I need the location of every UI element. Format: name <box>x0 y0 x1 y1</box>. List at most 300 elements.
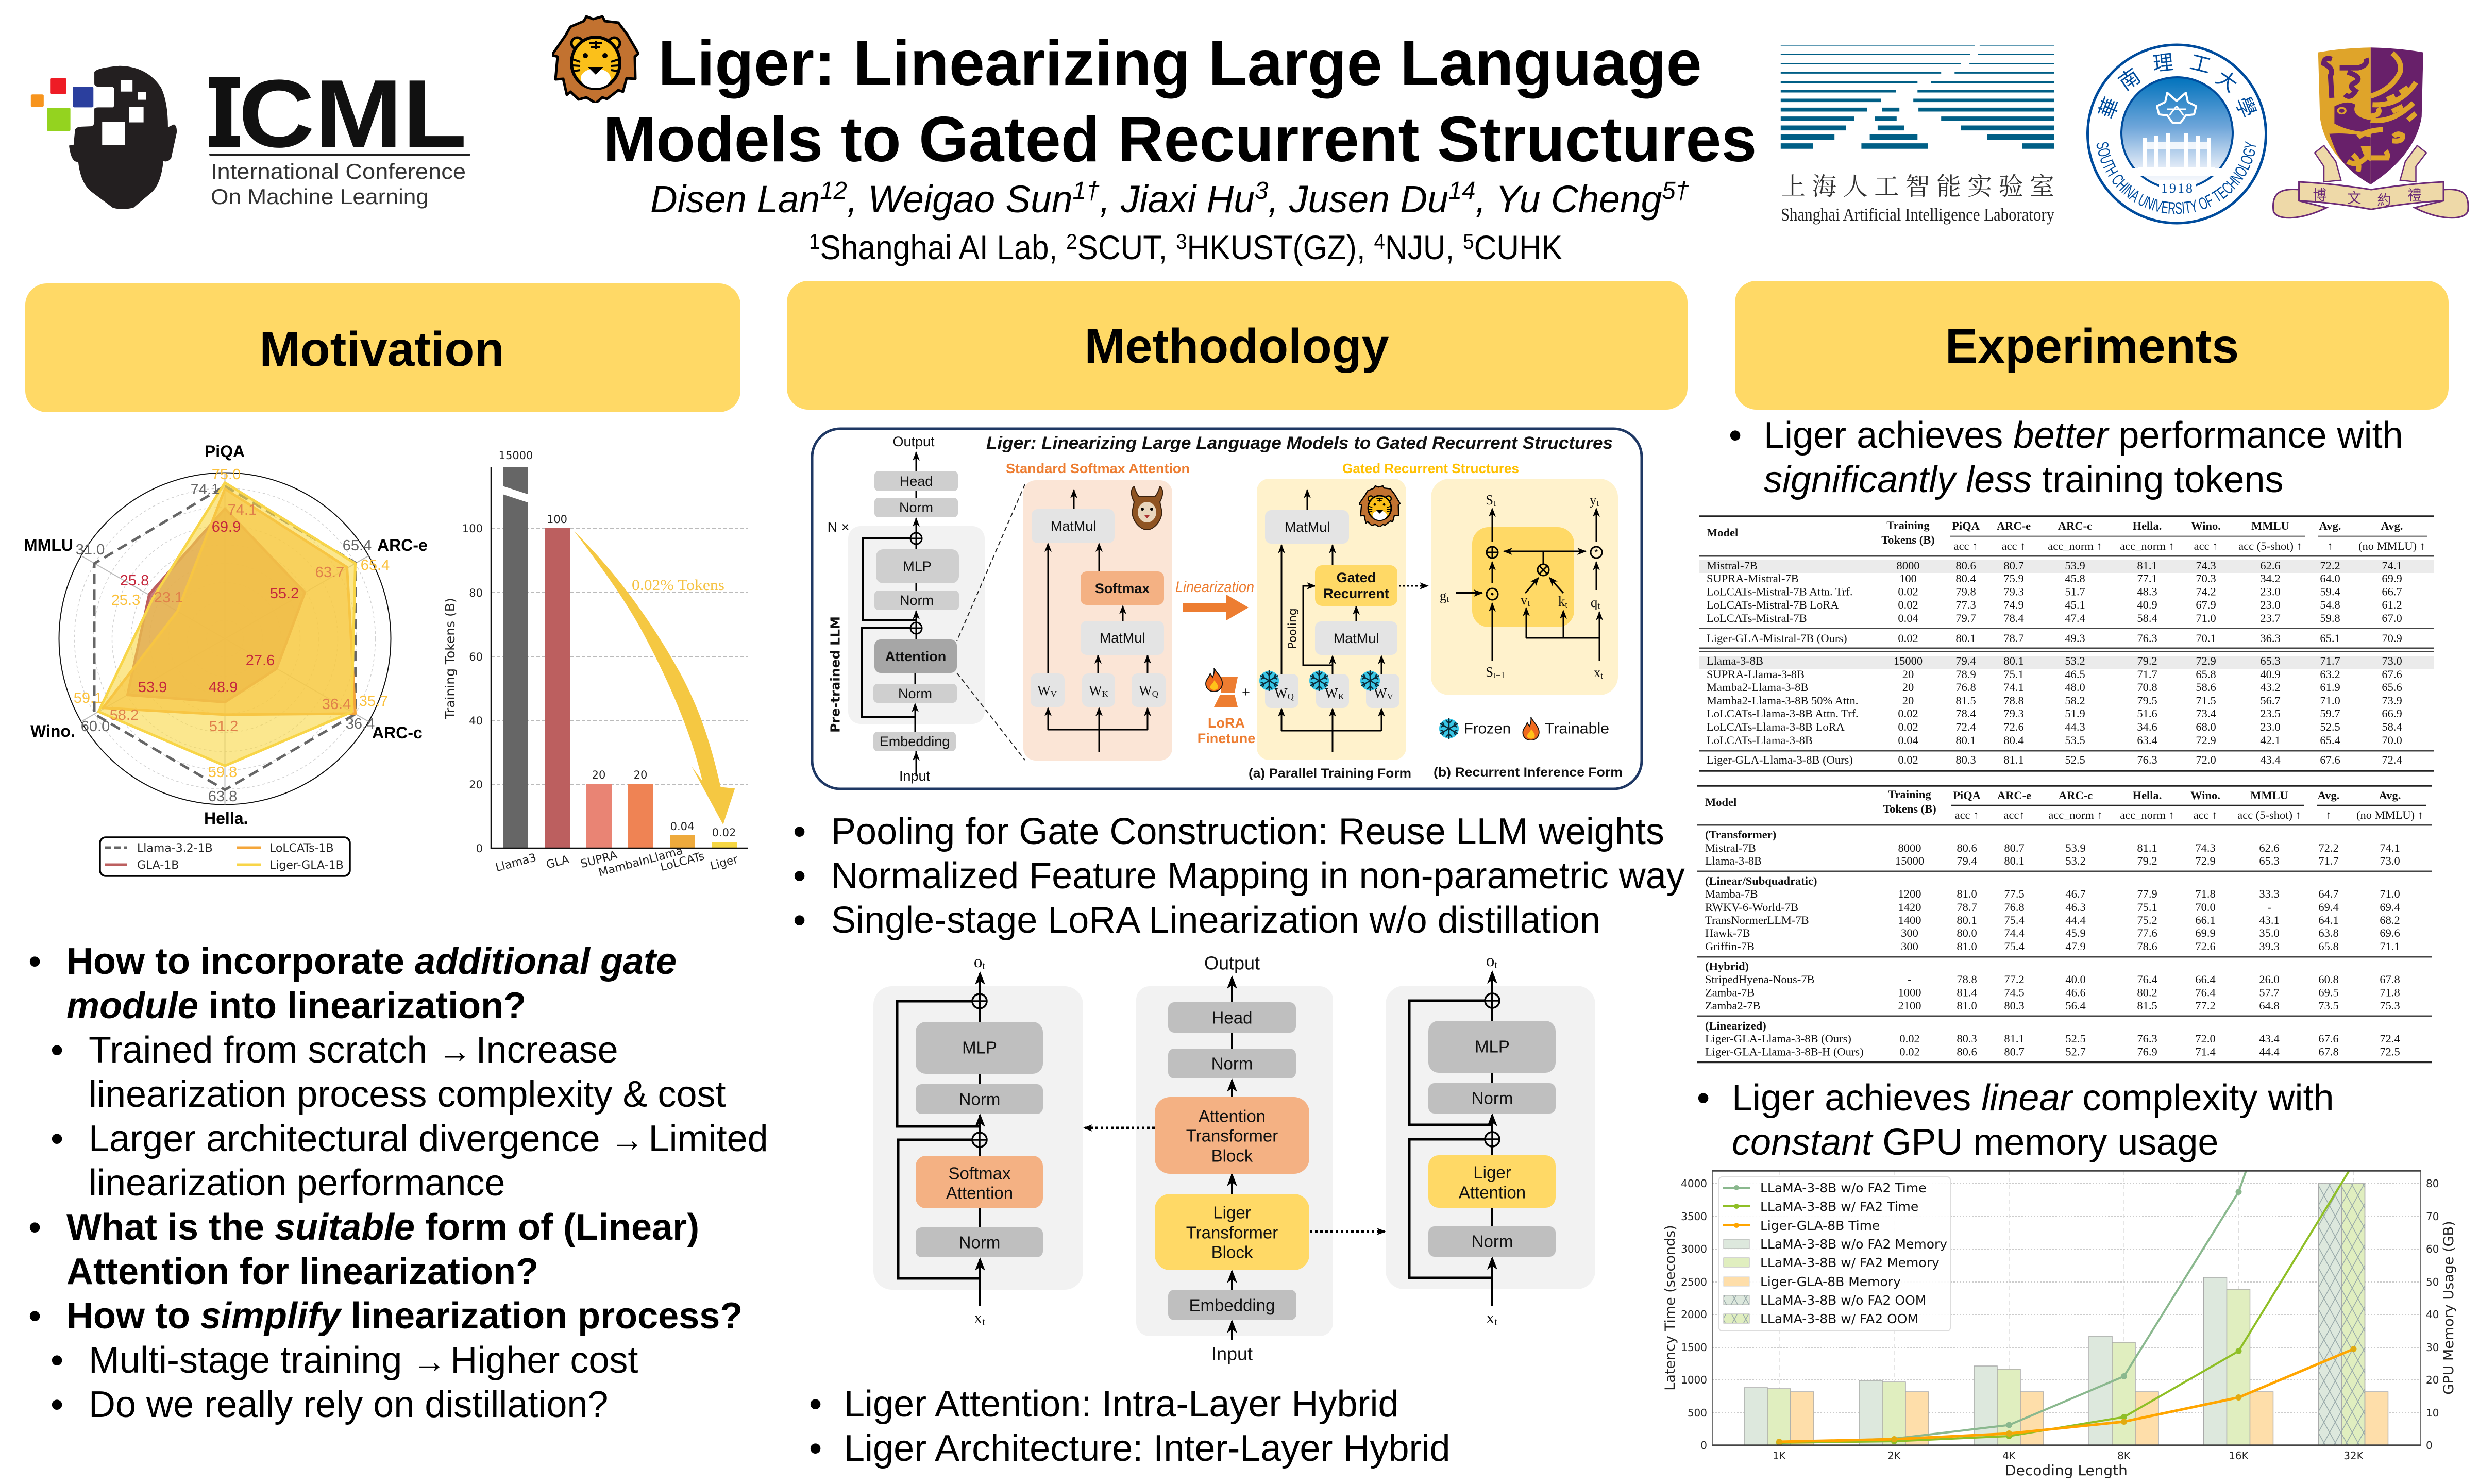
left axis ticks: 2000 <box>1681 1308 1707 1321</box>
chart legend: Liger-GLA-8B Memory <box>1760 1274 1901 1289</box>
table: model comparison: (Transformer) <box>1705 828 1776 841</box>
table: linearization results: 52.5 <box>2065 753 2085 766</box>
bar x labels: Llama3 <box>494 851 538 874</box>
logo: CUHK crest: 禮 <box>2407 188 2422 203</box>
panel: liger attention block: Norm <box>1472 1088 1513 1108</box>
left axis ticks: 4000 <box>1681 1177 1707 1190</box>
table: model comparison: 79.2 <box>2137 854 2157 867</box>
table: model comparison: 67.6 <box>2318 1032 2339 1045</box>
table: linearization results: 70.9 <box>2382 632 2402 645</box>
table: model comparison: 78.7 <box>1957 901 1977 914</box>
panel: recurrent inference form: t <box>1493 498 1496 508</box>
table: model comparison: 300 <box>1901 940 1918 953</box>
panel: recurrent inference form: t <box>1596 498 1599 508</box>
bar value labels: 0.02 <box>712 827 736 839</box>
bar value labels: 20 <box>592 769 605 781</box>
panel: transformer stack: Block <box>1211 1243 1253 1261</box>
table: linearization results: 72.0 <box>2196 753 2216 766</box>
table: linearization results: acc ↑ <box>2002 539 2026 552</box>
table: model comparison: 71.1 <box>2380 940 2400 953</box>
radar axis labels: Hella. <box>204 809 248 828</box>
diagram: Liger linearization framework <box>812 429 1642 789</box>
panel: pre-trained LLM stack: Head <box>900 474 933 489</box>
authors: , Weigao Sun <box>847 178 1073 221</box>
table: model comparison: 76.3 <box>2137 1032 2157 1045</box>
left axis ticks: 3000 <box>1681 1243 1707 1255</box>
arrow: linearization <box>1175 579 1254 620</box>
table: model comparison: 77.2 <box>2195 999 2216 1012</box>
table: linearization results: 23.5 <box>2260 707 2281 720</box>
table: linearization results: 65.4 <box>2320 734 2340 747</box>
table: linearization results: 34.6 <box>2137 720 2157 733</box>
x axis ticks: 8K <box>2117 1449 2131 1462</box>
text block: motivation bullets: • <box>50 1118 63 1159</box>
radar axis labels: PiQA <box>205 442 245 461</box>
bars <box>502 467 737 848</box>
y axis ticks <box>462 522 483 855</box>
table: model comparison: 77.6 <box>2137 926 2157 939</box>
radar legend: Llama-3.2-1B <box>137 842 213 855</box>
x axis ticks: 1K <box>1773 1449 1786 1462</box>
table: model comparison: RWKV-6-World-7B <box>1705 901 1798 914</box>
table: model comparison: 79.4 <box>1957 854 1977 867</box>
table: model comparison: 26.0 <box>2259 973 2280 986</box>
text block: motivation bullets: • <box>28 1295 41 1337</box>
panel: gated recurrent parallel training form <box>1257 461 1519 760</box>
radar legend <box>100 837 350 876</box>
table: model comparison: acc_norm ↑ <box>2048 808 2103 821</box>
text block: experiments bullet two: constant GPU memory usage <box>1732 1122 2218 1163</box>
table: linearization results: ↑ <box>2327 539 2333 552</box>
panel: pre-trained LLM stack: N × <box>828 519 849 535</box>
left axis ticks: 1000 <box>1681 1374 1707 1386</box>
table: model comparison: Liger-GLA-Llama-3-8B-H (Ours) <box>1705 1045 1864 1058</box>
table: linearization results: 72.9 <box>2196 734 2216 747</box>
text block: methodology bullets <box>793 811 1685 941</box>
radar values: 25.3 <box>111 592 140 609</box>
table: linearization results: 77.1 <box>2137 572 2157 585</box>
table: model comparison: 73.0 <box>2380 854 2400 867</box>
table: model comparison: acc↑ <box>2003 808 2025 821</box>
affiliations: 5 <box>1463 229 1474 254</box>
text block: methodology bullets: • <box>793 855 806 897</box>
table: model comparison: 53.2 <box>2065 854 2086 867</box>
table: linearization results: 67.6 <box>2382 668 2402 681</box>
table: model comparison: 81.0 <box>1957 887 1977 900</box>
table: linearization results: 0.02 <box>1898 598 1918 611</box>
table: model comparison: 73.5 <box>2318 999 2339 1012</box>
text block: motivation bullets: Attention for linearization? <box>66 1251 538 1292</box>
panel: pre-trained LLM stack: Embedding <box>880 734 950 749</box>
text block: motivation bullets: linearization performance <box>89 1162 505 1204</box>
table: linearization results: 67.6 <box>2320 753 2340 766</box>
table: linearization results: 40.9 <box>2260 668 2281 681</box>
table: linearization results: 47.4 <box>2065 612 2085 625</box>
logo: South China University of Technology: SOUTH CHINA UNIVERSITY OF TECHNOLOGY <box>2096 141 2256 214</box>
table: linearization results: Avg. <box>2319 519 2341 532</box>
left axis ticks: 3500 <box>1681 1210 1707 1223</box>
table: linearization results: 71.5 <box>2196 694 2216 707</box>
table: model comparison: 76.4 <box>2137 973 2157 986</box>
table: linearization results: 42.1 <box>2260 734 2281 747</box>
table: linearization results: 63.2 <box>2320 668 2340 681</box>
table: linearization results: 79.4 <box>1955 654 1976 667</box>
table: linearization results: 73.0 <box>2382 654 2402 667</box>
affiliations: 3 <box>1176 229 1187 254</box>
table: linearization results: 40.9 <box>2137 598 2157 611</box>
table: model comparison: Hawk-7B <box>1705 926 1750 939</box>
table: linearization results: 64.0 <box>2320 572 2340 585</box>
caption: b recurrent inference form: (b) Recurrent Inference Form <box>1434 765 1623 780</box>
table: linearization results: 0.02 <box>1898 632 1918 645</box>
table: model comparison: Model <box>1705 796 1736 808</box>
table: model comparison: 72.0 <box>2195 1032 2216 1045</box>
panel: standard softmax attention: W <box>1037 683 1051 698</box>
arrow: attention block to softmax attention <box>1084 1126 1155 1129</box>
table: linearization results: 73.4 <box>2196 707 2216 720</box>
chart legend: LLaMA-3-8B w/ FA2 OOM <box>1760 1311 1918 1326</box>
logo: South China University of Technology <box>2086 43 2267 225</box>
text block: motivation bullets: Do we really rely on distillation? <box>89 1384 608 1425</box>
table: linearization results: 73.9 <box>2382 694 2402 707</box>
panel: transformer stack: Head <box>1212 1008 1252 1027</box>
legend: frozen and trainable: Frozen <box>1464 720 1511 737</box>
text block: methodology bullets: Normalized Feature Mapping in non-parametric way <box>831 855 1685 897</box>
text block: methodology bullets: Single-stage LoRA Linearization w/o distillation <box>831 900 1600 941</box>
table: model comparison: 80.1 <box>1957 914 1977 926</box>
right axis ticks: 50 <box>2426 1276 2439 1288</box>
table: model comparison: 46.6 <box>2065 986 2086 999</box>
panel: softmax attention block: MLP <box>962 1038 997 1057</box>
panel: gated recurrent parallel training form: Gated <box>1337 570 1376 585</box>
radar values: 27.6 <box>246 652 275 669</box>
table: model comparison: acc ↑ <box>2194 808 2217 821</box>
text block: methodology bullets: • <box>793 900 806 941</box>
table: model comparison: Hella. <box>2133 789 2162 802</box>
table: model comparison: 46.7 <box>2065 887 2086 900</box>
table: model comparison: 80.7 <box>2004 1045 2025 1058</box>
radar values: 74.1 <box>228 502 257 518</box>
table: model comparison: 8000 <box>1898 841 1921 854</box>
table: model comparison: 64.8 <box>2259 999 2280 1012</box>
affiliations: HKUST(GZ), <box>1187 228 1374 266</box>
table: linearization results: Hella. <box>2133 519 2162 532</box>
text block: motivation bullets: Larger architectural divergence → Limited <box>89 1118 768 1159</box>
table: model comparison: 68.2 <box>2380 914 2400 926</box>
bar x labels: Liger <box>709 853 740 873</box>
panel: transformer stack: Attention <box>1199 1107 1266 1125</box>
table: model comparison: 77.2 <box>2004 973 2025 986</box>
panel: gated recurrent parallel training form: Q <box>1288 692 1294 701</box>
panel: recurrent inference form: t <box>1446 594 1449 604</box>
table: linearization results: 65.8 <box>2196 668 2216 681</box>
table: linearization results: 51.9 <box>2065 707 2085 720</box>
table: model comparison: (Linearized) <box>1705 1019 1766 1032</box>
table: linearization results: 58.6 <box>2196 681 2216 694</box>
table: model comparison: Llama-3-8B <box>1705 854 1762 867</box>
table: model comparison: ↑ <box>2325 808 2332 821</box>
table: model comparison: 80.6 <box>1957 841 1977 854</box>
text block: motivation bullets: What is the suitable form of (Linear) <box>66 1207 699 1248</box>
arrow: linearization: Linearization <box>1175 579 1254 596</box>
table: linearization results: 0.02 <box>1898 753 1918 766</box>
bar value labels <box>499 449 736 839</box>
table: model comparison: 60.8 <box>2318 973 2339 986</box>
affiliations: 2 <box>1066 229 1077 254</box>
panel: gated recurrent parallel training form: V <box>1387 692 1394 701</box>
panel: gated recurrent parallel training form: MatMul <box>1285 519 1330 535</box>
table: linearization results: 75.1 <box>2003 668 2024 681</box>
panel: gated recurrent parallel training form: Pooling <box>1286 608 1300 649</box>
logo: South China University of Technology: 理 <box>2152 51 2174 76</box>
table: linearization results: Liger-GLA-Llama-3-8B (Ours) <box>1707 753 1853 766</box>
panel: recurrent inference form: S <box>1486 664 1493 680</box>
heading: Experiments <box>1735 281 2449 410</box>
logo: South China University of Technology: 大 <box>2212 66 2241 96</box>
table: model comparison: 80.7 <box>2004 841 2025 854</box>
table: linearization results: 71.0 <box>2196 612 2216 625</box>
chart legend: LLaMA-3-8B w/o FA2 OOM <box>1760 1293 1926 1308</box>
text block: methodology bullets: Pooling for Gate Construction: Reuse LLM weights <box>831 811 1664 852</box>
panel: gated recurrent parallel training form: W <box>1374 685 1387 701</box>
panel: transformer stack: Transformer <box>1186 1126 1278 1145</box>
logo: CUHK crest <box>2273 47 2468 218</box>
table: model comparison: Avg. <box>2318 789 2339 802</box>
panel: pre-trained LLM stack: Pre-trained LLM <box>828 616 843 733</box>
table: linearization results: 72.4 <box>1955 720 1976 733</box>
table: model comparison: 69.4 <box>2318 901 2339 914</box>
table: linearization results: 45.8 <box>2065 572 2085 585</box>
icon: LoRA finetune <box>1198 668 1255 746</box>
radar values: 63.7 <box>315 564 344 581</box>
table: model comparison: ARC-c <box>2059 789 2093 802</box>
table: linearization results: 48.0 <box>2065 681 2085 694</box>
bar x labels: SUPRA <box>579 849 619 871</box>
logo: Shanghai AI Laboratory: 上海人工智能实验室 <box>1781 173 2054 200</box>
table: linearization results: 71.0 <box>2320 694 2340 707</box>
table: model comparison: 81.4 <box>1957 986 1977 999</box>
title: Models to Gated Recurrent Structures <box>603 104 1757 175</box>
text block: experiments bullet one: • <box>1729 415 1742 456</box>
table: linearization results: 53.5 <box>2065 734 2085 747</box>
table: model comparison: - <box>2267 901 2271 914</box>
affiliations: 1 <box>809 229 820 254</box>
table: linearization results: 100 <box>1899 572 1917 585</box>
table: linearization results: 23.7 <box>2260 612 2281 625</box>
left axis ticks <box>1681 1177 1707 1452</box>
panel: standard softmax attention: MatMul <box>1100 630 1145 646</box>
panel: recurrent inference form: t <box>1597 601 1600 610</box>
table: model comparison: 76.4 <box>2195 986 2216 999</box>
panel: transformer stack: Block <box>1211 1146 1253 1166</box>
y axis title: Training Tokens (B) <box>443 598 458 720</box>
panel: softmax attention block: Norm <box>959 1233 1000 1252</box>
icon: lion <box>1359 486 1400 527</box>
table: model comparison: 71.4 <box>2195 1045 2216 1058</box>
table: linearization results: 79.8 <box>1955 585 1976 598</box>
text block: experiments bullet two: Liger achieves linear complexity with <box>1732 1077 2334 1119</box>
table: linearization results: 80.1 <box>2003 654 2024 667</box>
panel: standard softmax attention: W <box>1089 683 1102 698</box>
right axis ticks: 40 <box>2426 1308 2439 1321</box>
table: model comparison: ARC-e <box>1997 789 2031 802</box>
bar x labels: GLA <box>545 853 570 872</box>
radar values: 65.4 <box>361 557 390 574</box>
table: model comparison: 77.5 <box>2004 887 2025 900</box>
table: linearization results: 61.9 <box>2320 681 2340 694</box>
bar value labels: 20 <box>634 769 647 781</box>
radar values: 58.2 <box>110 707 139 723</box>
panel: pre-trained LLM stack: Norm <box>898 686 932 701</box>
table: linearization results: 48.3 <box>2137 585 2157 598</box>
affiliations: Shanghai AI Lab, <box>820 228 1066 266</box>
table: model comparison: 43.1 <box>2259 914 2280 926</box>
table: linearization results: 78.7 <box>2003 632 2024 645</box>
table: model comparison: 47.9 <box>2065 940 2086 953</box>
left axis ticks: 500 <box>1688 1407 1707 1419</box>
table: model comparison: 72.9 <box>2195 854 2216 867</box>
table: linearization results: 68.0 <box>2196 720 2216 733</box>
panel: recurrent inference form: t <box>1600 671 1603 680</box>
panel: pre-trained LLM stack: Input <box>899 768 931 784</box>
table: model comparison: 52.5 <box>2065 1032 2086 1045</box>
table: model comparison: 72.6 <box>2195 940 2216 953</box>
table: model comparison: 74.5 <box>2004 986 2025 999</box>
table: model comparison: 69.9 <box>2195 926 2216 939</box>
table: model comparison: 46.3 <box>2065 901 2086 914</box>
heading: Experiments: Experiments <box>1945 319 2239 374</box>
table: linearization results: 75.9 <box>2003 572 2024 585</box>
table: model comparison: 64.7 <box>2318 887 2339 900</box>
radar values: 63.8 <box>208 788 237 805</box>
table: linearization results: 54.8 <box>2320 598 2340 611</box>
panel: transformer stack: Transformer <box>1186 1223 1278 1242</box>
table: linearization results: 46.5 <box>2065 668 2085 681</box>
panel: softmax attention block <box>873 953 1083 1328</box>
panel: recurrent inference form: t <box>1527 598 1530 608</box>
table: model comparison: 71.7 <box>2318 854 2339 867</box>
table: model comparison: 0.02 <box>1899 1032 1920 1045</box>
table: model comparison: 2100 <box>1898 999 1921 1012</box>
table: linearization results: 53.2 <box>2065 654 2085 667</box>
table: model comparison: 53.9 <box>2065 841 2086 854</box>
table: model comparison: 1400 <box>1898 914 1921 926</box>
text block: motivation bullets: Multi-stage training → Higher cost <box>89 1340 638 1381</box>
chart legend: Liger-GLA-8B Time <box>1760 1218 1880 1233</box>
panel: softmax attention block: Norm <box>959 1089 1000 1109</box>
table: linearization results: 0.02 <box>1898 585 1918 598</box>
x axis ticks: 2K <box>1887 1449 1901 1462</box>
table: model comparison: 75.4 <box>2004 940 2025 953</box>
panel: recurrent inference form: y <box>1590 492 1596 508</box>
table: linearization results: SUPRA-Llama-3-8B <box>1707 668 1805 681</box>
table: linearization results: Mamba2-Llama-3-8B 50% Attn. <box>1707 694 1858 707</box>
authors: 14 <box>1448 177 1476 205</box>
table: model comparison: 71.0 <box>2380 887 2400 900</box>
table: linearization results: 20 <box>1902 668 1914 681</box>
chart legend: LLaMA-3-8B w/ FA2 Memory <box>1760 1255 1940 1270</box>
memory bars <box>1744 1184 2388 1445</box>
panel: gated recurrent parallel training form: K <box>1338 692 1345 701</box>
table: model comparison: 66.4 <box>2195 973 2216 986</box>
table: linearization results: acc ↑ <box>2194 539 2218 552</box>
bar x labels <box>494 845 740 880</box>
table: linearization results: PiQA <box>1952 519 1980 532</box>
table: model comparison: (Linear/Subquadratic) <box>1705 874 1817 887</box>
legend: frozen and trainable: Trainable <box>1545 720 1609 737</box>
latency lines <box>1779 1171 2354 1443</box>
text block: hybrid bullets: Liger Attention: Intra-Layer Hybrid <box>844 1384 1399 1425</box>
table: linearization results: 0.02 <box>1898 707 1918 720</box>
icon: Liger lion mascot <box>552 16 638 103</box>
text block: experiments bullet one: Liger achieves better performance with <box>1764 415 2403 456</box>
table: linearization results: 58.4 <box>2382 720 2402 733</box>
panel: gated recurrent parallel training form: Recurrent <box>1323 586 1389 601</box>
authors: , Yu Cheng <box>1476 178 1662 221</box>
right axis ticks: 80 <box>2426 1177 2439 1190</box>
panel: gated recurrent parallel training form: W <box>1325 685 1338 701</box>
title: Liger: Linearizing Large Language <box>658 28 1702 99</box>
arrow: 0.02% tokens: 0.02% Tokens <box>632 577 724 594</box>
table: model comparison: 35.0 <box>2259 926 2280 939</box>
table: model comparison: 81.1 <box>2004 1032 2025 1045</box>
table: linearization results: ARC-c <box>2058 519 2092 532</box>
panel: liger attention block <box>1386 952 1595 1328</box>
panel: recurrent inference form: * <box>1594 547 1598 559</box>
panel: transformer stack <box>1136 952 1333 1364</box>
table: linearization results: (no MMLU) ↑ <box>2358 539 2425 552</box>
table: linearization results: 0.04 <box>1898 612 1918 625</box>
icon: llama <box>1132 486 1162 530</box>
panel: liger attention block: t <box>1494 1316 1497 1328</box>
table: linearization results: Mistral-7B <box>1707 559 1758 572</box>
table: linearization results: Llama-3-8B <box>1707 654 1763 667</box>
table: linearization results: Training <box>1886 519 1930 532</box>
panel: standard softmax attention: K <box>1102 688 1109 699</box>
panel: transformer stack: Embedding <box>1189 1295 1275 1315</box>
chart legend: LLaMA-3-8B w/ FA2 Time <box>1760 1199 1918 1214</box>
table: linearization results: 8000 <box>1896 559 1920 572</box>
table: model comparison: 78.6 <box>2137 940 2157 953</box>
authors: , Jiaxi Hu <box>1100 178 1255 221</box>
table: linearization results: 51.7 <box>2065 585 2085 598</box>
table: model comparison: Liger-GLA-Llama-3-8B (Ours) <box>1705 1032 1851 1045</box>
table: linearization results: 59.8 <box>2320 612 2340 625</box>
table: model comparison: 66.1 <box>2195 914 2216 926</box>
text block: methodology bullets: • <box>793 811 806 852</box>
table: linearization results: 74.9 <box>2003 598 2024 611</box>
affiliations: SCUT, <box>1077 228 1176 266</box>
logo: Shanghai AI Laboratory: Shanghai Artificial Intelligence Laboratory <box>1781 205 2054 225</box>
table: model comparison: - <box>1908 973 1912 986</box>
bar value labels: 0.04 <box>670 820 694 833</box>
y axis ticks: 60 <box>469 651 483 663</box>
panel: softmax attention block: t <box>982 959 985 972</box>
table: model comparison: 65.8 <box>2318 940 2339 953</box>
radar values: 48.9 <box>209 679 238 696</box>
table: linearization results: 66.9 <box>2382 707 2402 720</box>
table: model comparison: 39.3 <box>2259 940 2280 953</box>
radar values: 59.1 <box>74 690 103 706</box>
right axis ticks: 30 <box>2426 1341 2439 1354</box>
y axis ticks: 80 <box>469 587 483 599</box>
table: linearization results: 80.4 <box>1955 572 1976 585</box>
radar legend: LoLCATs-1B <box>269 842 334 855</box>
right axis ticks: 60 <box>2426 1243 2439 1255</box>
table: linearization results: 15000 <box>1894 654 1923 667</box>
authors: Disen Lan <box>650 178 822 221</box>
table: linearization results: 58.4 <box>2137 612 2157 625</box>
